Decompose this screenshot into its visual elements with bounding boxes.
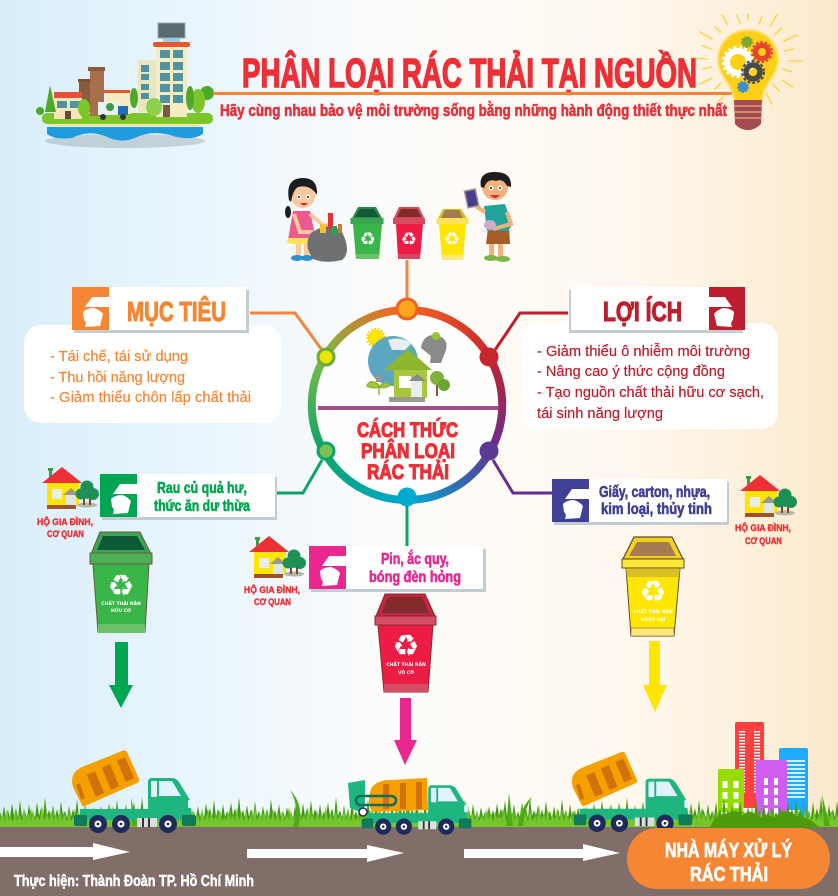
icon: household source left: CƠ QUAN: [47, 529, 84, 540]
arrow: road left: [0, 843, 130, 860]
arrow: road right: [464, 844, 620, 861]
hub label: PHÂN LOẠI: [361, 439, 455, 463]
arrow: road centre: [247, 845, 404, 862]
arrow: pink down: [394, 698, 417, 765]
arrow: green down: [109, 642, 133, 708]
hub label: [357, 418, 458, 484]
heading: MỤC TIÊU: MỤC TIÊU: [127, 296, 226, 327]
heading: LỢI ÍCH: [569, 287, 745, 333]
illustration: green city island: [36, 23, 214, 148]
category label: organic waste: [100, 474, 277, 520]
panel: goals text: [24, 325, 281, 423]
panel: benefits text: tái sinh năng lượng: [537, 405, 663, 422]
hub label: RÁC THẢI: [367, 461, 449, 484]
panel: goals text: - Tái chế, tái sử dụng: [50, 348, 188, 365]
truck: centre with lowered bed: [348, 778, 471, 835]
hub nodes: [318, 299, 498, 506]
category label: recyclables: Giấy, carton, nhựa,: [599, 484, 710, 501]
bin: red inorganic: CHẤT THẢI RẮN: [386, 660, 426, 668]
icon: household source centre: [244, 536, 306, 608]
illustration: top three bins: ♻: [401, 229, 417, 250]
icon: household source centre: HỘ GIA ĐÌNH,: [244, 584, 300, 596]
bin: yellow hazardous: [622, 537, 684, 636]
road: [0, 827, 838, 896]
heading: LỢI ÍCH: LỢI ÍCH: [603, 296, 682, 327]
title underline: [213, 92, 732, 95]
grass strip: [0, 788, 838, 828]
subtitle: Hãy cùng nhau bảo vệ môi trường sống bằng những hành động thiết thực nhất: [220, 101, 727, 120]
hub: central circle: [312, 299, 502, 506]
panel: benefits text: [522, 323, 778, 429]
illustration: top three bins: [350, 207, 468, 260]
icon: household source right: [735, 475, 797, 547]
panel: benefits text: - Nâng cao ý thức cộng đồng: [537, 363, 725, 380]
category label: recyclables: kim loại, thủy tinh: [601, 501, 712, 518]
category label: organic waste: thức ăn dư thừa: [154, 498, 250, 515]
icon: household source centre: CƠ QUAN: [254, 597, 291, 608]
connector lines from the hub: [250, 260, 568, 546]
destination pill: treatment plant: NHÀ MÁY XỬ LÝ: [665, 838, 793, 862]
bin: green organic: ♻: [108, 569, 134, 604]
bin: yellow hazardous: CHẤT THẢI RẮN: [633, 607, 673, 615]
truck: green left: [72, 750, 196, 833]
category label: recyclables: [552, 479, 729, 525]
illustration: boy holding recyclables: [464, 172, 512, 262]
bin: green organic: CHẤT THẢI RẮN: [101, 599, 141, 607]
category label: hazardous waste: Pin, ắc quy,: [381, 550, 449, 568]
illustration: factory city: [718, 722, 808, 822]
panel: benefits text: - Tạo nguồn chất thải hữu cơ sạch,: [537, 384, 764, 401]
hub label: CÁCH THỨC: [357, 418, 458, 442]
destination pill: treatment plant: RÁC THẢI: [690, 863, 768, 886]
bin: green organic: [90, 532, 152, 633]
heading: MỤC TIÊU: [72, 287, 249, 333]
icon: household source left: HỘ GIA ĐÌNH,: [37, 516, 93, 528]
panel: benefits text: - Giảm thiểu ô nhiễm môi trường: [537, 343, 750, 360]
destination pill: treatment plant: [627, 828, 830, 889]
arrow: yellow down: [643, 641, 667, 712]
bin: red inorganic: [375, 594, 436, 692]
panel: goals text: - Giảm thiểu chôn lấp chất thải: [50, 389, 251, 406]
illustration: top three bins: ♻: [360, 229, 376, 250]
bin: yellow hazardous: ♻: [640, 575, 666, 610]
hub icon: eco house and globe: [367, 330, 450, 402]
credit line: Thực hiện: Thành Đoàn TP. Hồ Chí Minh: [14, 873, 254, 890]
illustration: girl with garbage bag: [285, 178, 347, 262]
bushes at factory: [710, 811, 820, 828]
bin: green organic: HỮU CƠ: [111, 607, 131, 614]
icon: household source right: CƠ QUAN: [745, 536, 782, 547]
bin: yellow hazardous: NGUY HẠI: [641, 617, 666, 623]
icon: household source left: [37, 467, 99, 540]
bin: red inorganic: ♻: [393, 629, 419, 664]
icon: household source right: HỘ GIA ĐÌNH,: [735, 522, 791, 534]
panel: goals text: - Thu hồi năng lượng: [50, 369, 185, 386]
illustration: light bulb with gears: [693, 14, 802, 130]
bin: red inorganic: VÔ CƠ: [398, 669, 414, 676]
category label: hazardous waste: [309, 546, 486, 592]
category label: hazardous waste: bóng đèn hỏng: [369, 569, 461, 586]
category label: organic waste: Rau củ quả hư,: [157, 480, 247, 497]
truck: green right: [572, 752, 692, 832]
illustration: top three bins: ♻: [444, 229, 460, 250]
